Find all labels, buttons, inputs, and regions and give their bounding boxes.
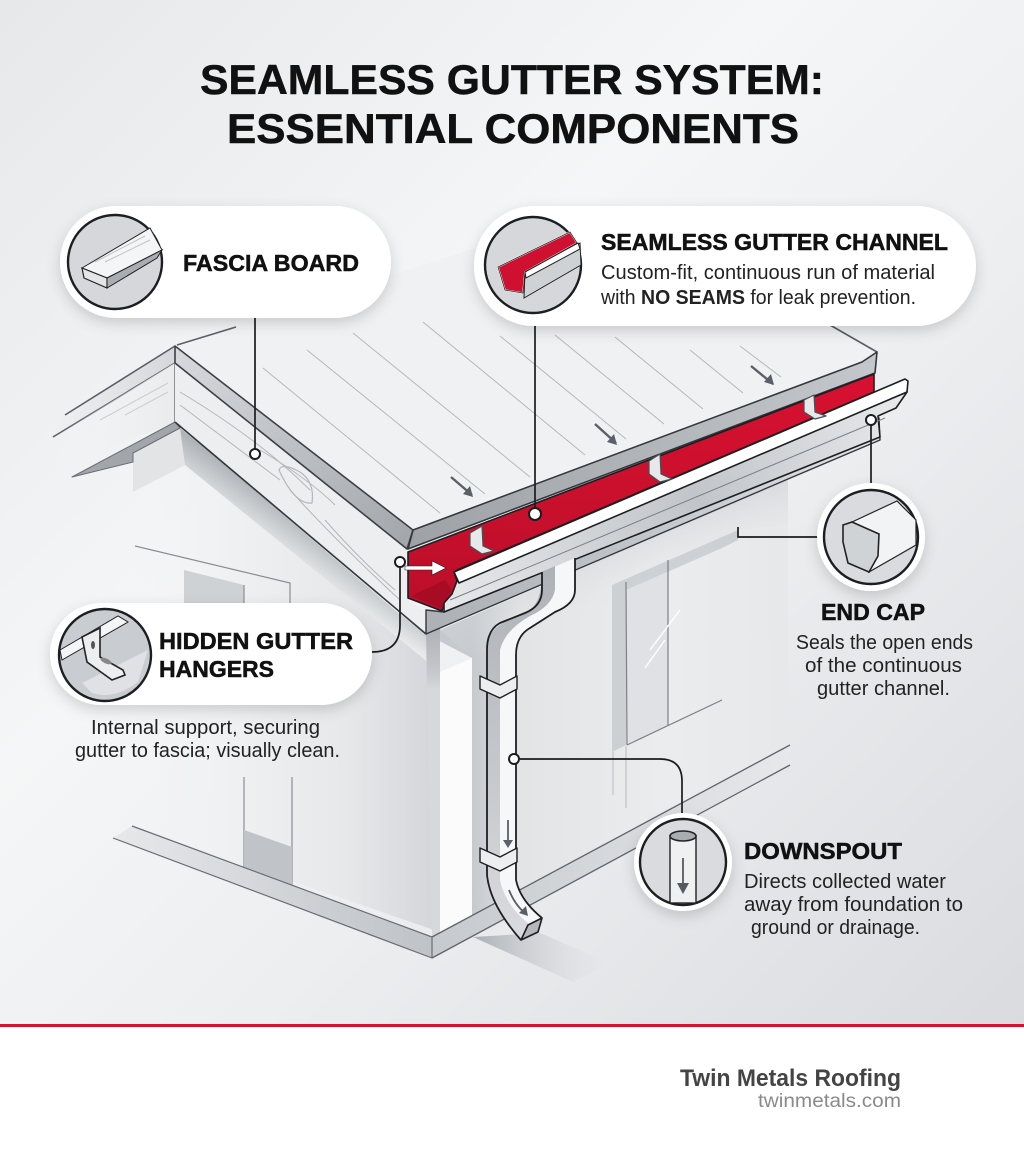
- callout: end cap: Seals the open ends: [796, 632, 973, 654]
- wood fascia: [175, 363, 426, 634]
- icon: hanger: [59, 609, 151, 701]
- icon: downspout pipe: [640, 819, 726, 905]
- gutter channel red: [408, 374, 874, 611]
- callout: end cap: END CAP: [821, 599, 925, 625]
- left wall: [132, 425, 440, 932]
- callout: fascia board: [60, 206, 391, 318]
- house illustration: [53, 240, 908, 982]
- callout: downspout: ground or drainage.: [751, 917, 920, 939]
- text: hangers description: Internal support, securing: [91, 717, 320, 739]
- downspout: [480, 558, 575, 940]
- arrow: into gutter: [405, 561, 446, 575]
- footer band: [0, 1024, 1024, 1154]
- left gable: [53, 346, 180, 477]
- footer brand: twinmetals.com: [758, 1091, 901, 1112]
- icon: fascia board: [68, 215, 162, 309]
- callout: downspout: [634, 813, 963, 939]
- icon: end cap: [824, 490, 918, 584]
- footer brand: [680, 1065, 901, 1112]
- right wall: [426, 479, 788, 937]
- callout: seamless gutter channel: Custom-fit, continuous run of material: [601, 262, 935, 284]
- callout: downspout: Directs collected water: [744, 871, 946, 893]
- title: ESSENTIAL COMPONENTS: [227, 105, 799, 152]
- eave strip: [408, 352, 877, 549]
- text: hangers description: [75, 717, 340, 762]
- callout: seamless gutter channel: with NO SEAMS for leak prevention.: [600, 287, 916, 309]
- callout: seamless gutter channel: [474, 206, 976, 326]
- hangers: [470, 395, 826, 554]
- icon: gutter channel: [485, 217, 581, 313]
- callout: hidden gutter hangers: HANGERS: [159, 656, 274, 682]
- callout: end cap: [796, 483, 973, 700]
- gable roof edge band: [175, 346, 413, 549]
- callout: seamless gutter channel: SEAMLESS GUTTER CHANNEL: [601, 229, 948, 255]
- footer brand: Twin Metals Roofing: [680, 1065, 901, 1092]
- leader lines: [255, 318, 871, 815]
- soffit band: [180, 428, 440, 672]
- callout: end cap: gutter channel.: [817, 678, 950, 700]
- callout: hidden gutter hangers: [50, 603, 372, 705]
- roof plane: [177, 240, 877, 530]
- callout: hidden gutter hangers: HIDDEN GUTTER: [159, 628, 353, 654]
- leader dots: [250, 415, 876, 764]
- callout: end cap: of the continuous: [805, 655, 962, 677]
- title: SEAMLESS GUTTER SYSTEM:: [200, 56, 824, 103]
- base strip: [113, 745, 790, 982]
- gutter soffit: [426, 418, 880, 634]
- title: [200, 56, 824, 152]
- callout: fascia board: FASCIA BOARD: [183, 250, 359, 276]
- text: hangers description: gutter to fascia; visually clean.: [75, 740, 340, 762]
- callout: downspout: away from foundation to: [744, 894, 963, 916]
- callout: downspout: DOWNSPOUT: [744, 838, 902, 864]
- gutter front: [444, 379, 908, 612]
